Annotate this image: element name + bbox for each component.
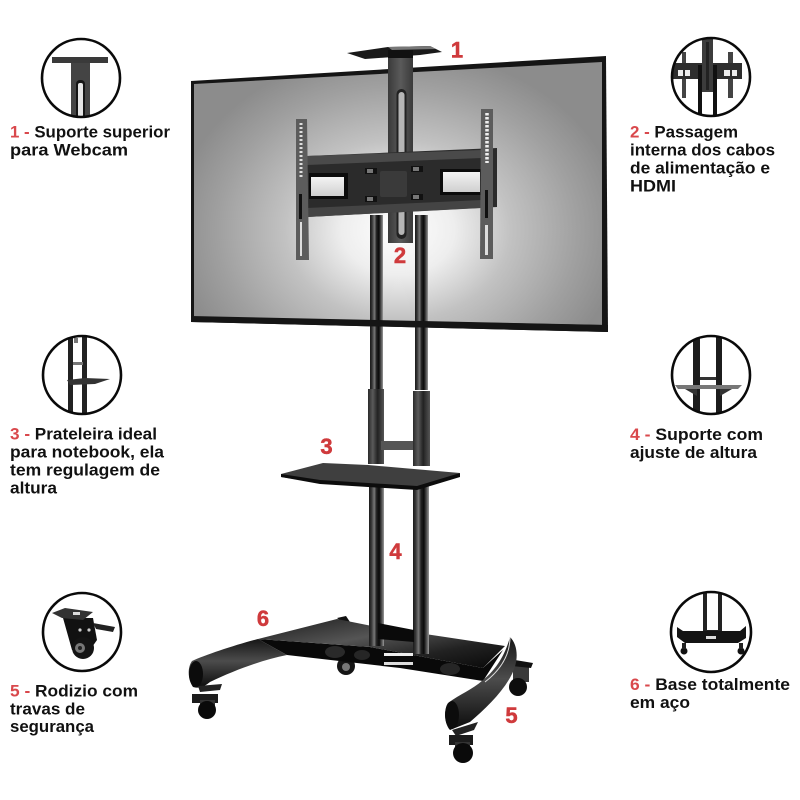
- VESA mount bracket: [307, 148, 497, 217]
- icon: shelf: [43, 335, 121, 415]
- column bracket: [378, 623, 414, 642]
- icon: top support: [42, 39, 120, 120]
- left arm: [189, 639, 287, 688]
- text: [630, 122, 775, 196]
- rear casters: [337, 616, 533, 696]
- text: 5 - Rodizio com: [10, 682, 138, 700]
- text: segurança: [10, 717, 95, 736]
- left end cap: [189, 661, 203, 687]
- pole cross bar: [381, 441, 413, 450]
- text: 6 - Base totalmente: [630, 675, 790, 694]
- text: [10, 122, 170, 160]
- text: para Webcam: [10, 140, 128, 160]
- base front face: [258, 639, 503, 681]
- callout 5: caster: [10, 593, 138, 736]
- callout 6: steel base: [630, 592, 790, 712]
- text: 2 - Passagem: [630, 122, 738, 142]
- text: [10, 424, 165, 498]
- number markers: [257, 38, 518, 728]
- icon: base front view: [671, 592, 751, 672]
- right arm: [445, 637, 517, 730]
- callout 4: height adjustment: [630, 334, 763, 462]
- number markers: 3: [320, 434, 333, 459]
- text: travas de: [10, 700, 85, 718]
- icon: mount: [672, 37, 750, 117]
- icon: poles with shelf: [672, 334, 750, 416]
- text: [630, 675, 790, 712]
- sleeves above shelf: [368, 389, 430, 466]
- text: [630, 425, 763, 462]
- number markers: 5: [505, 703, 518, 728]
- number markers: 1: [451, 38, 463, 62]
- text: 4 - Suporte com: [630, 425, 763, 444]
- right front caster: [449, 722, 478, 763]
- text: 3 - Prateleira ideal: [10, 424, 157, 444]
- lower poles: [369, 480, 429, 654]
- notebook shelf: [281, 463, 460, 490]
- TV bottom bezel: [191, 316, 608, 332]
- left vertical rail: [296, 119, 309, 260]
- text: 1 - Suporte superior: [10, 122, 170, 142]
- text: altura: [10, 478, 58, 498]
- callout 3: notebook shelf: [10, 335, 165, 498]
- number markers: 4: [389, 539, 402, 564]
- rolling base: [189, 480, 533, 763]
- text: HDMI: [630, 176, 676, 196]
- base plate top: [258, 619, 505, 668]
- number markers: 2: [394, 243, 406, 268]
- TV screen: [191, 56, 608, 332]
- right vertical rail: [480, 109, 493, 259]
- base openings: [325, 646, 460, 675]
- text: [10, 682, 138, 736]
- webcam top shelf: [347, 46, 442, 59]
- text: interna dos cabos: [630, 140, 775, 160]
- right end cap: [445, 701, 459, 729]
- central cable channel upright: [388, 58, 413, 243]
- text: em aço: [630, 693, 690, 712]
- text: ajuste de altura: [630, 443, 758, 462]
- upper poles: [370, 215, 428, 390]
- callout 2: cable passage: [630, 37, 775, 196]
- text: para notebook, ela: [10, 442, 165, 462]
- callout 1: webcam support: [10, 39, 170, 160]
- text: de alimentação e: [630, 158, 770, 178]
- left front caster: [192, 684, 222, 719]
- icon: caster wheel: [43, 593, 121, 671]
- product: TV stand with screen: [189, 46, 608, 763]
- number markers: 6: [257, 606, 269, 631]
- text: tem regulagem de: [10, 460, 160, 480]
